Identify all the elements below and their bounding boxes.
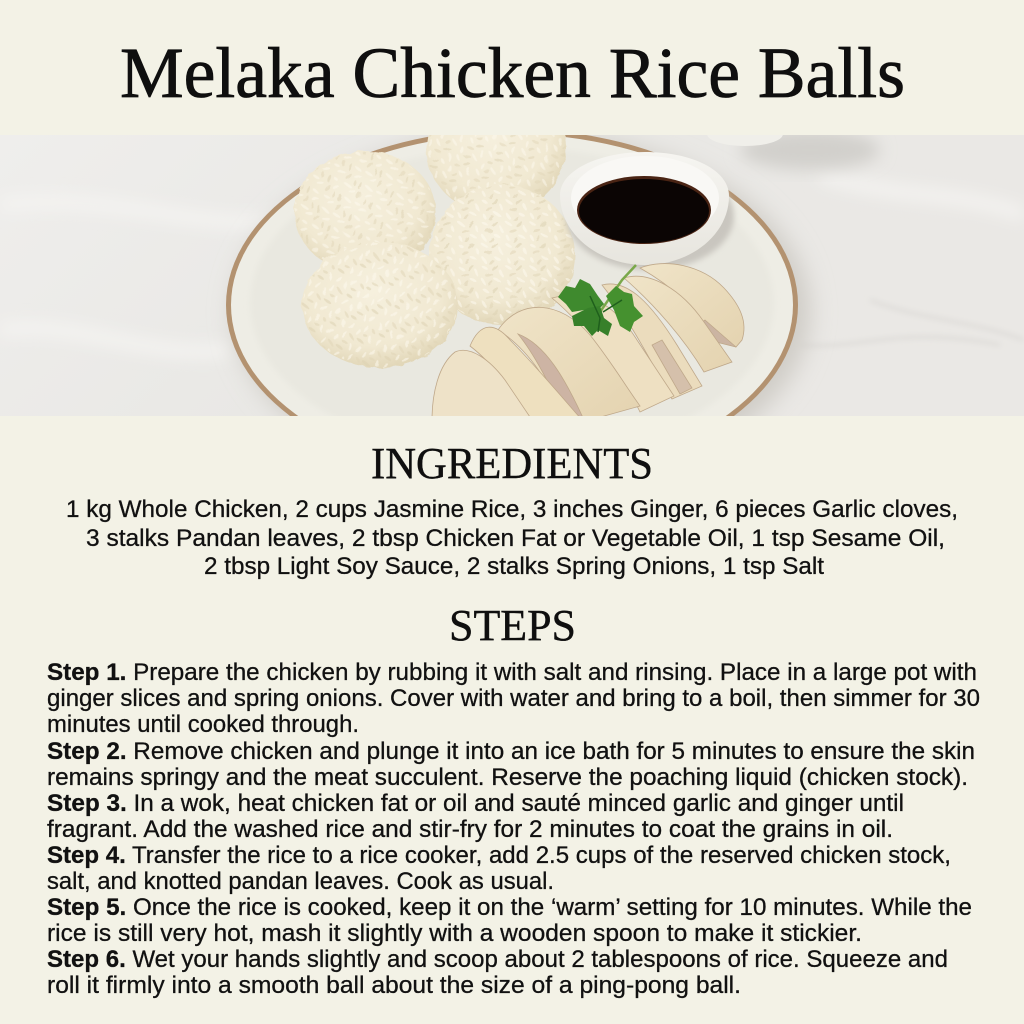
ingredients heading: INGREDIENTS <box>371 439 653 488</box>
slice 7 <box>640 264 744 347</box>
ingredients list: 1 kg Whole Chicken, 2 cups Jasmine Rice, 3 inches Ginger, 6 pieces Garlic cloves, <box>66 496 958 523</box>
slice 1 <box>432 350 532 420</box>
rice ball centre <box>429 185 575 325</box>
rice ball front <box>302 242 458 368</box>
step 6: roll it firmly into a smooth ball about the size of a ping-pong ball. <box>47 972 741 999</box>
sliced chicken <box>432 264 744 420</box>
sauce bowl <box>560 152 734 270</box>
ingredients list: 3 stalks Pandan leaves, 2 tbsp Chicken Fat or Vegetable Oil, 1 tsp Sesame Oil, <box>86 525 945 552</box>
step 2: Step 2. Remove chicken and plunge it into an ice bath for 5 minutes to ensure the skin <box>47 738 975 765</box>
step 1 <box>47 659 980 738</box>
title: Melaka Chicken Rice Balls <box>120 33 905 113</box>
step 2 <box>47 738 975 791</box>
ingredients list: 2 tbsp Light Soy Sauce, 2 stalks Spring Onions, 1 tsp Salt <box>204 553 824 580</box>
step 4 <box>47 842 951 895</box>
steps heading: STEPS <box>449 601 576 650</box>
step 5: rice is still very hot, mash it slightly with a wooden spoon to make it stickier. <box>47 920 862 947</box>
step 6 <box>47 946 948 999</box>
step 3: fragrant. Add the washed rice and stir-fry for 2 minutes to coat the grains in oil. <box>47 816 893 843</box>
step 1: Step 1. Prepare the chicken by rubbing it with salt and rinsing. Place in a large pot with <box>47 659 977 686</box>
step 1: minutes until cooked through. <box>47 711 359 738</box>
step 1: ginger slices and spring onions. Cover with water and bring to a boil, then simmer for 30 <box>47 685 980 712</box>
background bowl <box>740 135 880 174</box>
step 5: Step 5. Once the rice is cooked, keep it on the ‘warm’ setting for 10 minutes. While the <box>47 894 972 921</box>
steps list <box>47 659 980 999</box>
rice ball top <box>426 135 566 201</box>
step 4: Step 4. Transfer the rice to a rice cooker, add 2.5 cups of the reserved chicken stock, <box>47 842 951 869</box>
slice 2 <box>470 327 582 420</box>
step 3 <box>47 790 904 843</box>
step 4: salt, and knotted pandan leaves. Cook as usual. <box>47 868 554 895</box>
photo: chicken rice balls on a plate <box>8 135 1024 416</box>
slice 3 <box>498 307 640 420</box>
step 5 <box>47 894 972 947</box>
step 6: Step 6. Wet your hands slightly and scoop about 2 tablespoons of rice. Squeeze and <box>47 946 948 973</box>
plate <box>226 135 798 416</box>
slice 6 <box>624 276 732 372</box>
rice ball left <box>294 151 436 273</box>
step 3: Step 3. In a wok, heat chicken fat or oil and sauté minced garlic and ginger until <box>47 790 904 817</box>
slice 5 <box>602 284 702 399</box>
ingredients list <box>66 496 958 580</box>
plate shadow <box>226 135 817 416</box>
parsley garnish <box>558 265 643 336</box>
step 2: remains springy and the meat succulent. Reserve the poaching liquid (chicken stock). <box>47 764 968 791</box>
slice 4 <box>552 295 674 412</box>
